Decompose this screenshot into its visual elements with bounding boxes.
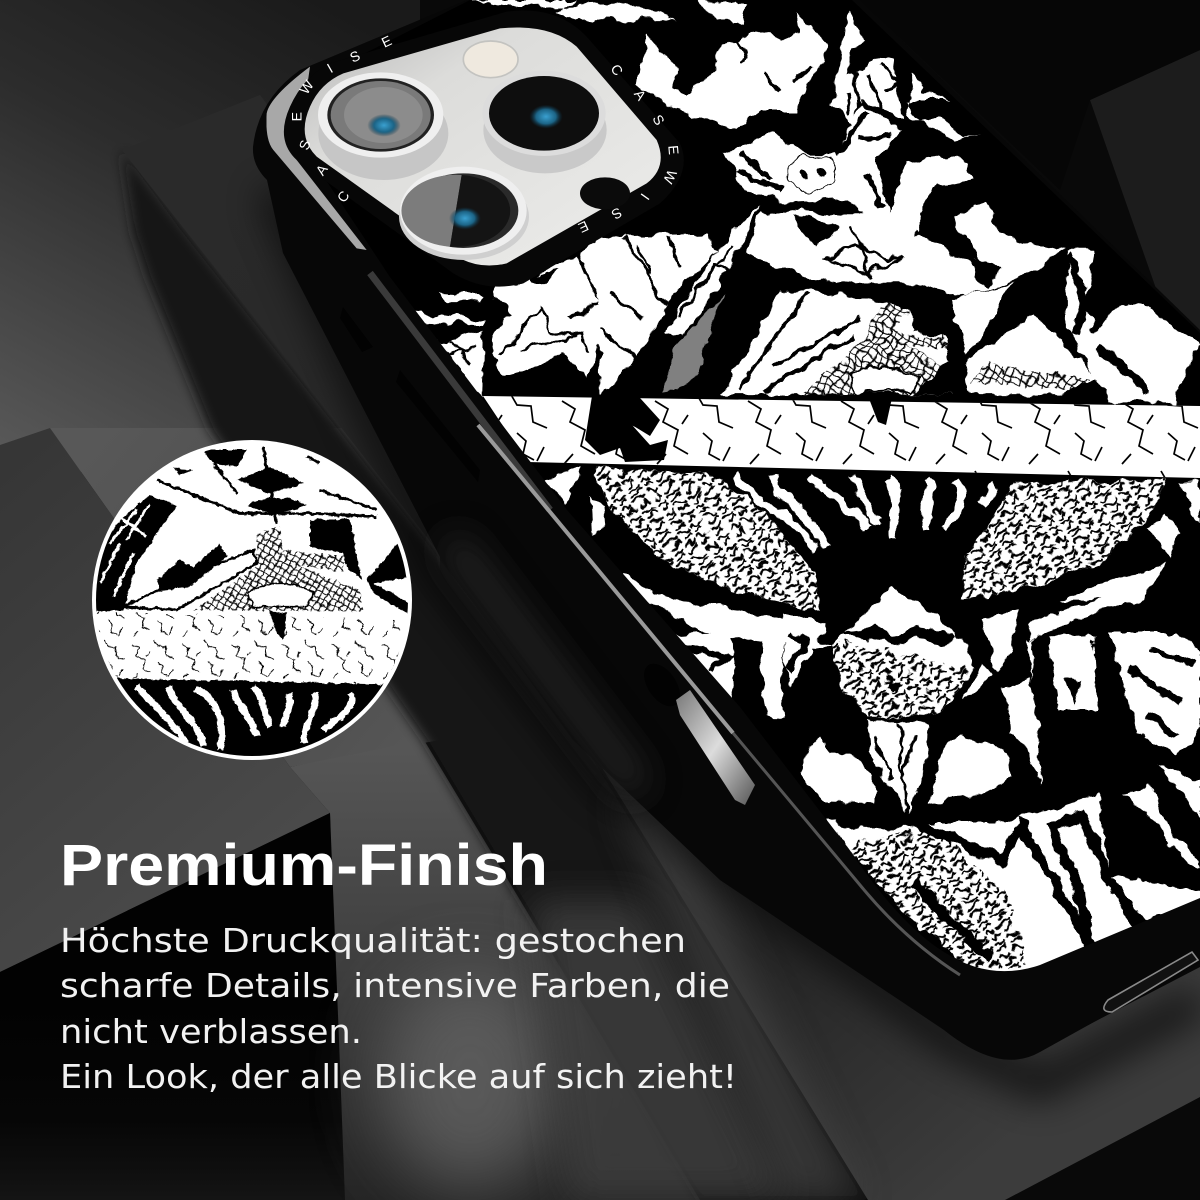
body text: nicht verblassen. [60, 1012, 362, 1051]
USB port [1104, 952, 1198, 1012]
card [1048, 634, 1098, 711]
circular detail inset [90, 440, 420, 763]
brand lettering on ring: E [576, 218, 591, 236]
arm right [1028, 597, 1138, 642]
horn right [983, 611, 1017, 673]
ship lower left [661, 295, 722, 394]
top scraps [470, 0, 745, 23]
lens: upper right [482, 71, 607, 173]
flame feather right [929, 734, 1013, 803]
art: cracked band [483, 396, 1200, 478]
volume button slot [637, 657, 687, 713]
tentacles [738, 475, 994, 547]
creature right [1067, 249, 1200, 402]
lit side panel [450, 540, 640, 790]
brand lettering on ring: A [631, 86, 650, 104]
brand lettering on ring: A [312, 161, 331, 178]
brand lettering on ring: S [347, 47, 362, 66]
brand lettering on ring: C [607, 61, 626, 79]
inset left black mass [90, 495, 177, 612]
lens: lower [399, 167, 529, 260]
inset band [90, 612, 413, 685]
sensor dot [580, 177, 630, 209]
inset lower black [113, 678, 413, 763]
hanging right leaf [1002, 680, 1040, 784]
brand lettering on ring: S [609, 204, 625, 223]
right stripes [1124, 765, 1200, 868]
camera glass [305, 27, 661, 266]
phone shadow [273, 190, 1200, 1085]
brand lettering on ring: W [296, 76, 317, 97]
art strip beside ring [266, 67, 367, 250]
art: lower part [673, 589, 1200, 983]
art: crumpled area beside camera [416, 242, 601, 398]
brand lettering on ring: I [324, 60, 336, 76]
ladder [665, 207, 761, 337]
body text: Höchste Druckqualität: gestochen [60, 921, 686, 960]
lower tangle [826, 795, 1200, 983]
left hatch region [596, 233, 715, 394]
hanging left leaf [760, 642, 786, 720]
demon head [830, 589, 971, 717]
bezel strip [370, 273, 550, 510]
brand lettering on ring: C [334, 188, 353, 205]
black swirl [585, 396, 668, 462]
flash [463, 41, 518, 78]
lens: upper left [318, 72, 448, 180]
inset right wedge [367, 540, 413, 617]
art: left lower arm and leaf [543, 467, 830, 648]
art: upper part [470, 0, 1200, 612]
brand lettering on ring: S [649, 112, 668, 128]
mid scales and serpent [722, 291, 964, 394]
brand lettering on ring [288, 32, 682, 236]
metallic edge highlight [478, 425, 733, 733]
pennant [906, 73, 983, 142]
skull right [1109, 633, 1200, 757]
centre spike [866, 721, 929, 814]
inset tentacles [137, 687, 352, 750]
inset top figures [173, 450, 307, 512]
brand lettering on ring: E [379, 32, 394, 51]
kite [1147, 515, 1180, 559]
left fragment [676, 630, 736, 698]
spire [833, 11, 902, 126]
brand lettering on ring: I [638, 191, 653, 203]
body text [60, 921, 737, 1096]
camera ring [284, 11, 684, 287]
drip [868, 396, 892, 425]
brand lettering on ring: W [660, 167, 680, 187]
tower and skull [726, 107, 902, 222]
volume button [676, 690, 755, 805]
smoke shape [638, 11, 830, 130]
brand lettering on ring: E [288, 112, 304, 121]
inset dark wedge [310, 518, 362, 580]
triangle panel [948, 283, 1013, 356]
heading: Premium-Finish [60, 833, 548, 898]
brand lettering on ring: E [665, 145, 682, 155]
left wing of dome [593, 468, 822, 612]
flame feather left [801, 738, 877, 803]
right wing of dome [960, 480, 1166, 600]
phone body [253, 0, 1200, 1060]
body text: Ein Look, der alle Blicke auf sich zieht! [60, 1057, 737, 1096]
phone artwork [416, 0, 1200, 972]
inset scales [193, 527, 363, 612]
side button upper [396, 370, 480, 482]
brand lettering on ring: S [296, 138, 314, 152]
large white figure [745, 157, 1063, 297]
side port [340, 307, 373, 352]
lower wing strip [1059, 563, 1166, 600]
camera island [266, 11, 684, 287]
inset torn black [157, 543, 227, 590]
body text: scharfe Details, intensive Farben, die [60, 966, 730, 1005]
lower edge highlight [733, 733, 960, 975]
